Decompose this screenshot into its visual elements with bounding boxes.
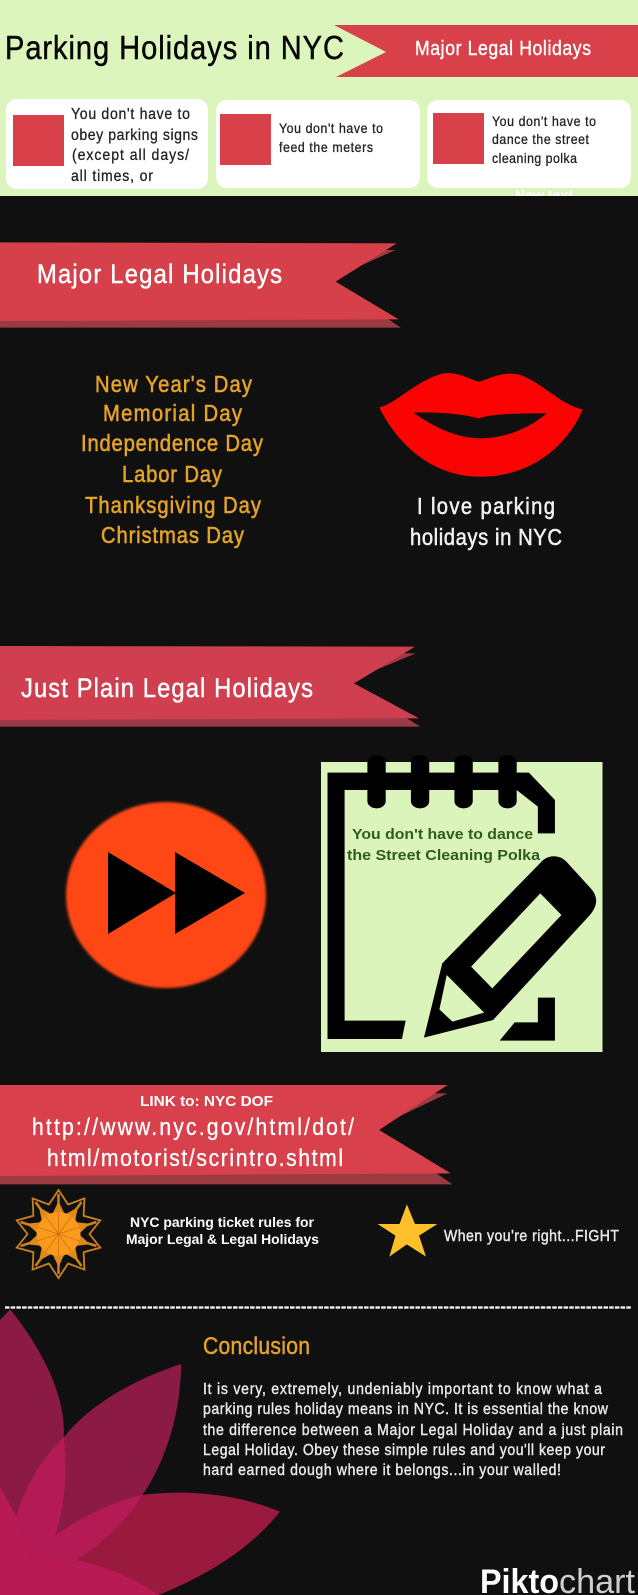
card: feed the meters: You don't have to <box>279 120 383 136</box>
card: obey parking signs <box>6 99 208 189</box>
conclusion paragraph: parking rules holiday means in NYC. It is essential the know <box>203 1400 608 1418</box>
notepad text <box>347 826 541 864</box>
icon: yellow star <box>378 1204 437 1257</box>
list of major holidays <box>81 371 263 548</box>
conclusion paragraph: It is very, extremely, undeniably important to know what a <box>203 1380 603 1398</box>
icon: red lips <box>379 373 583 477</box>
card: obey parking signs: all times, or <box>71 167 153 185</box>
caption: i love parking holidays <box>410 493 562 550</box>
card: feed the meters <box>216 100 420 188</box>
list of major holidays: Labor Day <box>122 461 222 487</box>
header ribbon: Major Legal Holidays <box>415 37 591 59</box>
notepad text: the Street Cleaning Polka <box>347 847 541 864</box>
decoration: crimson flower <box>0 1309 280 1595</box>
banner: link to nyc dof <box>0 1085 452 1184</box>
list of major holidays: Memorial Day <box>103 400 242 426</box>
card: street cleaning polka: cleaning polka <box>492 150 578 166</box>
list of major holidays: New Year's Day <box>95 371 252 397</box>
notepad text: You don't have to dance <box>352 826 533 843</box>
icon: fast forward button <box>66 802 266 988</box>
banner: just plain legal holidays <box>0 646 420 727</box>
conclusion paragraph: the difference between a Major Legal Holiday and a just plain <box>203 1421 623 1439</box>
stray clipped text: New text <box>515 187 573 203</box>
list of major holidays: Thanksgiving Day <box>85 492 261 518</box>
card: street cleaning polka: You don't have to <box>492 113 596 129</box>
banner: link to nyc dof: html/motorist/scrintro.shtml <box>47 1145 343 1171</box>
icon: notepad and pencil <box>328 755 596 1041</box>
banner: link to nyc dof: LINK to: NYC DOF <box>140 1093 273 1110</box>
notepad panel <box>321 755 602 1052</box>
card: street cleaning polka <box>427 100 631 188</box>
sunburst caption: Major Legal & Legal Holidays <box>126 1231 319 1247</box>
card: obey parking signs: obey parking signs <box>71 126 198 144</box>
card: obey parking signs: You don't have to <box>71 105 190 123</box>
list of major holidays: Independence Day <box>81 430 263 456</box>
header panel <box>0 0 638 203</box>
card: feed the meters: feed the meters <box>279 139 373 155</box>
conclusion heading: Conclusion <box>203 1333 310 1359</box>
card: street cleaning polka: dance the street <box>492 131 589 147</box>
header ribbon <box>334 25 638 77</box>
conclusion paragraph: hard earned dough where it belongs...in your walled! <box>203 1461 561 1479</box>
caption: i love parking holidays: I love parking <box>417 493 555 519</box>
banner: major legal holidays <box>0 242 401 328</box>
list of major holidays: Christmas Day <box>101 522 244 548</box>
caption: i love parking holidays: holidays in NYC <box>410 524 562 550</box>
icon: orange sunburst <box>17 1190 100 1278</box>
card: obey parking signs: (except all days/ <box>72 146 190 164</box>
banner: just plain legal holidays: Just Plain Legal Holidays <box>21 674 313 703</box>
title: Parking Holidays in NYC <box>5 29 344 66</box>
banner: link to nyc dof: http://www.nyc.gov/html/dot/ <box>32 1114 355 1140</box>
sunburst caption: NYC parking ticket rules for <box>130 1214 315 1230</box>
conclusion paragraph: Legal Holiday. Obey these simple rules and you'll keep your <box>203 1441 605 1459</box>
banner: major legal holidays: Major Legal Holidays <box>37 260 282 289</box>
piktochart logo <box>480 1563 636 1595</box>
star caption: When you're right...FIGHT <box>444 1227 619 1245</box>
sunburst caption <box>126 1214 319 1247</box>
conclusion paragraph <box>203 1380 623 1479</box>
